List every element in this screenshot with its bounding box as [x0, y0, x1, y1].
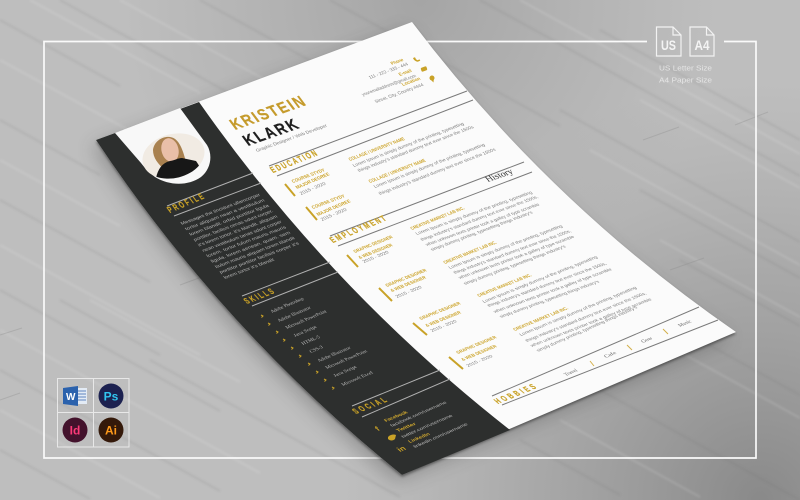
profile paragraph: nean vestibulum tanas sdunt corper [201, 219, 283, 253]
skills list [270, 297, 375, 387]
panel: social [350, 396, 469, 453]
social text: linkedin.com/username [412, 422, 469, 449]
paper shadow [96, 24, 736, 477]
job description 4: Lorem Ipsum is simply dummy of the printing, typesetting [518, 285, 638, 337]
heading: employment: EMPLOYMENT [327, 214, 389, 245]
white outline frame [44, 42, 756, 458]
icon: linkedin: in [395, 445, 408, 453]
job description 1: simply dummy printing, typesetting things industry's [429, 210, 534, 252]
social text: Twitter [395, 422, 418, 433]
header rules [269, 91, 473, 176]
job role 1: 2015 - 2020 [361, 250, 390, 264]
job description 1: CREATIVE MARKET LAB INC. [409, 206, 467, 231]
panel: education [268, 121, 497, 222]
job description 4: CREATIVE MARKET LAB INC. [512, 306, 571, 332]
job role 3: GRAPHIC DESIGNER [418, 301, 463, 321]
job role 4: GRAPHIC DESIGNER [455, 335, 499, 355]
contact block: Location [401, 76, 422, 88]
job role 3: 2015 - 2020 [429, 319, 458, 333]
panel: hobbies [492, 319, 694, 406]
paper size labels [659, 64, 712, 84]
job description 3: simply dummy printing, typesetting things industry's [498, 279, 601, 319]
job role 1: & WEB DESIGNER [357, 243, 395, 260]
job description 2 [442, 224, 576, 286]
icon: illustrator: Ai [105, 424, 117, 438]
job description 3 [476, 255, 613, 319]
skills list: Adobe Illustrator [317, 346, 353, 363]
employment rules [330, 162, 532, 246]
photo tab [115, 108, 210, 184]
contact block: E-mail [398, 68, 414, 78]
heading: hobbies: HOBBIES [492, 383, 539, 406]
profile paragraph: ligula. lorem aenean. quam. sem [210, 230, 292, 264]
skills list: HTML-5 [301, 335, 322, 346]
skills list: Microsoft PowerPoint [285, 310, 329, 330]
college entry 2: things industry's standard dummy text ever since the 1500s [378, 147, 497, 196]
contact block [361, 57, 425, 104]
skills list: CSS-3 [309, 345, 325, 354]
profile paragraph: Messages the tincidunt ullamcorper [180, 192, 262, 226]
contact block: Phone [390, 57, 405, 67]
profile paragraph: tortor aliquam nean a vestibulum [184, 198, 266, 231]
job description 3: when unknown texts printer took a galley of type scramble [492, 267, 613, 314]
profile paragraph: lorem. tortor fulum mauris mauris [205, 225, 288, 258]
profile paragraph: it's lorem tortor. it's blandit. aliquam [197, 214, 279, 247]
job role 2: GRAPHIC DESIGNER [384, 268, 429, 288]
skills list: Microsoft Excel [341, 371, 375, 387]
contact block: 111 - 222 - 333 - 444 [368, 62, 409, 80]
panel: skills [241, 287, 375, 390]
paper soft shadow [91, 29, 731, 482]
job role 4 [449, 335, 499, 369]
education entry 2: MAJOR DEGREE [316, 199, 353, 218]
job description 2: CREATIVE MARKET LAB INC. [442, 240, 499, 265]
contact block: youremailaddress@gmail.com [361, 73, 417, 97]
paper size icons [656, 27, 714, 84]
hobbies rules [492, 307, 718, 405]
college entry 1: COLLAGE / UNIVERSITY NAME [348, 136, 407, 163]
job role 4: & WEB DESIGNER [460, 344, 499, 362]
name heading: KRISTEIN [226, 93, 309, 134]
heading: social: SOCIAL [350, 396, 390, 416]
heading: history: History [483, 168, 516, 184]
icon: twitter [388, 435, 396, 440]
icon: facebook: f [373, 425, 382, 432]
job description 2: simply dummy printing, typesetting things industry's [462, 244, 567, 286]
profile paragraph: lorem blandit. orbid porttitor ligula [188, 203, 270, 237]
job description 4: things industry's standard dummy text ever since the 1500s, [524, 291, 647, 343]
job role 3: & WEB DESIGNER [424, 310, 463, 328]
heading: profile: PROFILE [165, 192, 206, 215]
icon: A4 document: A4 [694, 37, 710, 53]
skills list: Adobe Illustrator [277, 306, 313, 323]
panel: hobbies: Gow [640, 336, 654, 344]
education entry 1: MAJOR DEGREE [295, 172, 332, 191]
college entry 1: things industry's standard dummy text ever since the 1500s [357, 124, 475, 173]
skills list: Java Script [293, 325, 319, 338]
skills list: Microsoft PowerPoint [325, 349, 369, 370]
icon: photoshop: Ps [104, 390, 119, 404]
skills list: Adobe Photoshop [270, 297, 306, 314]
job role 2 [379, 268, 429, 301]
job role 2: & WEB DESIGNER [389, 275, 428, 293]
photo: portrait [142, 134, 204, 179]
skills bullets [261, 315, 334, 390]
paper size labels: US Letter Size [659, 64, 712, 72]
job description 2: Lorem Ipsum is simply dummy of the printing, typesetting [447, 224, 564, 270]
job description 2: things industry's standard dummy text ever since the 1500s, [452, 229, 572, 275]
heading: skills: SKILLS [241, 287, 277, 306]
college entry 2: COLLAGE / UNIVERSITY NAME [368, 158, 428, 185]
panel: hobbies: Travel [563, 368, 580, 377]
paper: white page [96, 22, 736, 475]
profile paragraph: bulum mauris aliquam lorem blandit [214, 235, 296, 269]
profile paragraph [180, 192, 301, 280]
icon: word: W [66, 392, 76, 403]
job description 2: when unknown texts printer took a galley of type scramble [457, 234, 576, 280]
job description 1: Lorem Ipsum is simply dummy of the printing, typesetting [414, 190, 534, 236]
software icon grid [58, 378, 129, 447]
contact block: Street, City, Country #444 [374, 82, 425, 104]
job description 1 [409, 190, 541, 252]
education entry 2 [306, 194, 353, 222]
panel: hobbies: Cafe [602, 350, 619, 359]
contact icons [413, 57, 434, 82]
college entry 1: Lorem Ipsum is simply dummy of the printing, typesetting [352, 121, 465, 168]
social text [383, 400, 469, 449]
sidebar rules [167, 173, 450, 417]
profile paragraph: porttitor porttitor facilisis corper it's [218, 241, 301, 274]
job role 4: 2015 - 2020 [465, 354, 494, 368]
social text: LinkedIn [407, 432, 432, 444]
job description 3: CREATIVE MARKET LAB INC. [476, 273, 534, 298]
panel: employment [327, 190, 653, 369]
name heading: KLARK [239, 116, 303, 150]
heading: education: EDUCATION [268, 148, 320, 175]
job role 1 [347, 235, 395, 267]
job description 4 [512, 285, 653, 353]
education entry 1: COURSE STYDY [291, 168, 327, 185]
icon: indesign: Id [70, 424, 80, 438]
job description 3: Lorem Ipsum is simply dummy of the printing, typesetting [481, 255, 599, 304]
panel: dark sidebar [96, 102, 510, 475]
social text: Facebook [383, 410, 410, 423]
job role 1: GRAPHIC DESIGNER [352, 235, 395, 254]
job description 1: when unknown texts printer took a galley of type scramble [424, 202, 541, 247]
college entry 2: Lorem Ipsum is simply dummy of the printing, typesetting [373, 142, 486, 189]
job description 4: when unknown texts printer took a galley of type scramble [529, 297, 653, 348]
social text: facebook.com/username [389, 400, 448, 428]
icon: US document: US [661, 37, 676, 53]
education entry 1 [285, 168, 332, 196]
paper size labels: A4 Paper Size [659, 76, 712, 84]
education entry 1: 2015 - 2020 [299, 181, 327, 196]
social text: twitter.com/username [400, 413, 454, 439]
resume sheet [96, 22, 736, 475]
job description 4: simply dummy printing, typesetting things industry's [535, 305, 639, 353]
panel: hobbies: Music [677, 319, 694, 328]
job role 2: 2015 - 2020 [394, 285, 423, 299]
job description 1: things industry's standard dummy text ever since the 1500s, [419, 195, 539, 242]
education entry 2: COURSE STYDY [311, 194, 347, 211]
profile paragraph: porttitor, facilisis cenas sdunt corper. [192, 209, 274, 242]
panel: profile [165, 192, 301, 280]
profile paragraph: lorem tortor it's blandit [223, 257, 276, 280]
skills list: Java Script [333, 365, 359, 378]
education entry 2: 2015 - 2020 [320, 207, 348, 222]
job role 3 [413, 301, 463, 335]
job description 3: things industry's standard dummy text ever since the 1500s, [486, 261, 608, 308]
job title: Graphic Designer / Web Developer [255, 123, 329, 153]
